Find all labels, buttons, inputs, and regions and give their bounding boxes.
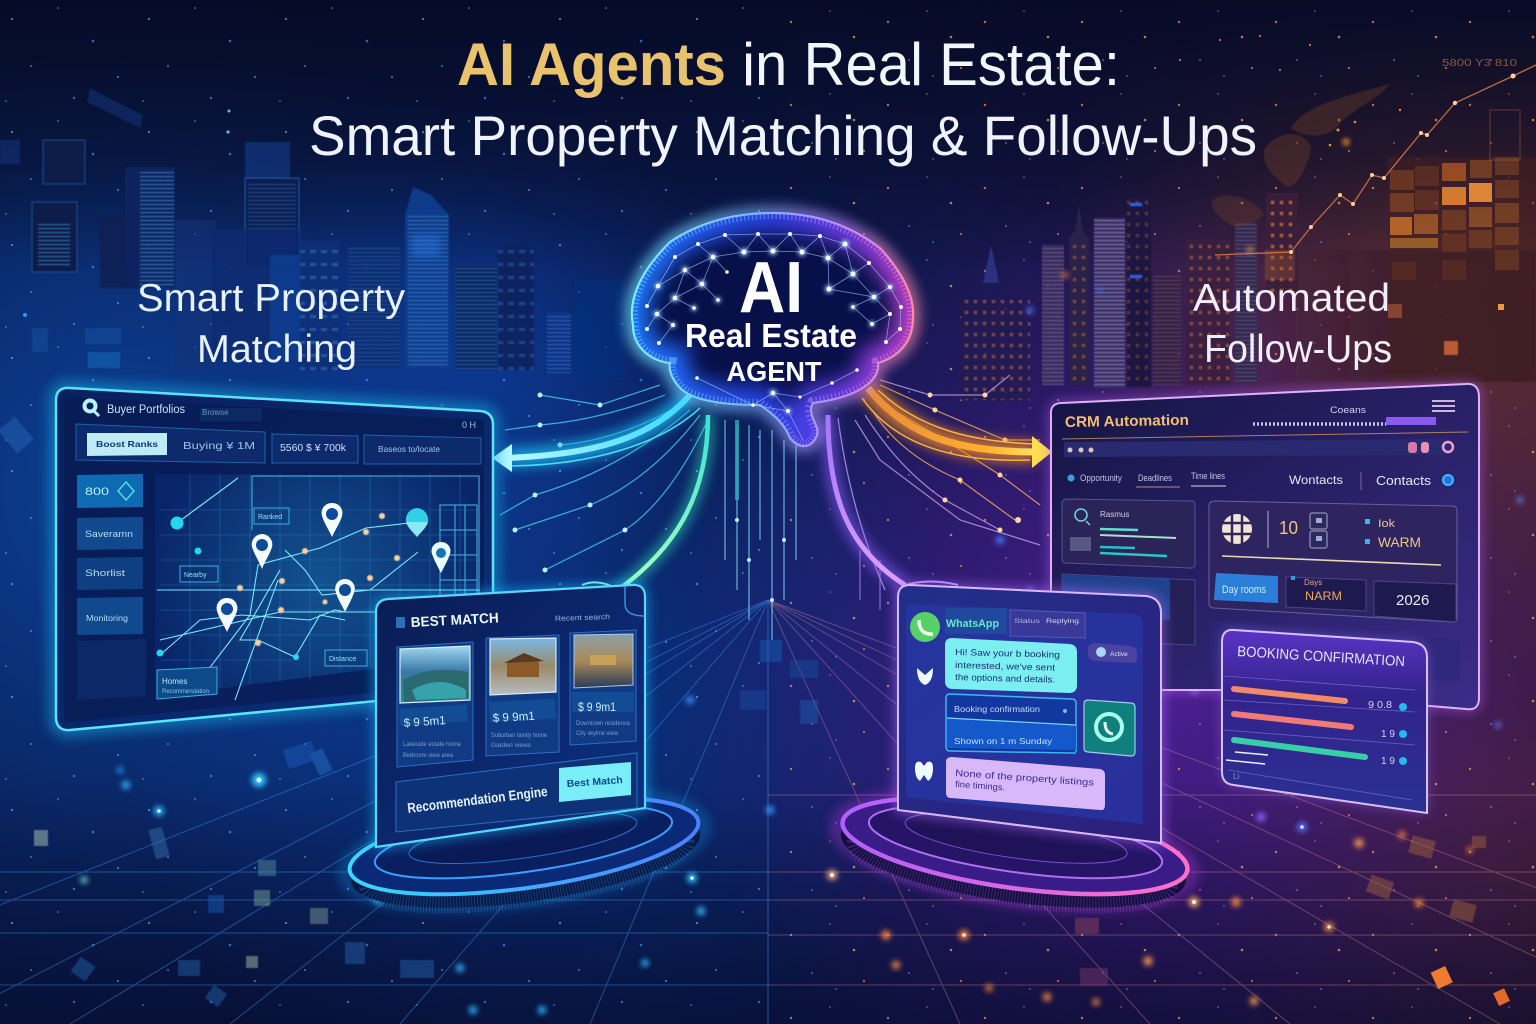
blue reply box: Booking confirmation — [954, 704, 1040, 714]
label: automated follow-ups: Follow-Ups — [1204, 328, 1392, 371]
lead score card: Iok — [1378, 518, 1396, 530]
property card 1: Lakeside estate home — [403, 741, 461, 748]
map pins — [217, 503, 451, 632]
map labels: Homes — [162, 677, 187, 686]
brain label: Real Estate — [685, 317, 857, 354]
property card 3: $ 9 9m1 — [578, 702, 616, 714]
panel: buyer portfolio map: Buyer Portfolios — [107, 404, 185, 416]
heading: BEST MATCH — [410, 609, 499, 630]
property card 3: City skyline view — [576, 730, 618, 737]
status pill — [1088, 643, 1137, 663]
crm tabs: Deadlines — [1138, 473, 1172, 483]
panel: buyer portfolio map: Browse — [202, 408, 229, 417]
sidebar: Shorlist — [85, 568, 126, 578]
property card 1 — [397, 642, 473, 767]
lead score card: NARM — [1305, 589, 1342, 603]
recommendation engine bar: Recommendation Engine — [406, 783, 548, 816]
panel: buyer portfolio map: 0 H — [462, 420, 476, 430]
crm header — [1062, 401, 1468, 439]
label: automated follow-ups: Automated — [1193, 277, 1390, 320]
crm tabs — [1068, 471, 1453, 490]
floor perspective grid — [0, 600, 1536, 1024]
orange window grid top right — [1388, 110, 1520, 355]
lead score card: Day rooms — [1222, 584, 1266, 596]
city skyline left — [0, 88, 625, 380]
panel: booking confirmation: 1 9 — [1381, 756, 1395, 767]
sidebar — [77, 474, 146, 700]
booking bars — [1234, 689, 1345, 701]
label: automated follow-ups — [1193, 277, 1392, 371]
property card 1: $ 9 5m1 — [403, 713, 446, 730]
lavender message bubble: None of the property listings — [955, 768, 1094, 789]
network nodes — [512, 392, 1021, 602]
brain label — [685, 248, 857, 387]
whatsapp header: Status — [1014, 618, 1041, 625]
map routes — [157, 478, 480, 700]
chat icons — [915, 668, 933, 781]
whatsapp header: Replying — [1046, 618, 1079, 625]
contact card — [1062, 499, 1195, 568]
crm header: CRM Automation — [1065, 412, 1189, 431]
panel: booking confirmation: Li — [1233, 772, 1239, 781]
brain: AI real estate agent — [632, 213, 913, 446]
panel: best match — [376, 585, 645, 847]
lead score card: WARM — [1378, 534, 1421, 550]
world map dots and chart line top right: 5800 Y3 810 — [1442, 58, 1518, 69]
brain label: AGENT — [726, 356, 822, 387]
brain label: AI — [739, 248, 803, 328]
map labels — [157, 508, 367, 699]
property card 2: Garden views — [491, 742, 532, 749]
city skyline right — [960, 157, 1536, 400]
filter tabs: Buying ¥ 1M — [183, 441, 255, 452]
cyan message bubble: interested, we've sent — [955, 660, 1056, 673]
sidebar: Monitoring — [86, 613, 128, 623]
brain network — [647, 234, 901, 440]
blue reply box: Shown on 1 m Sunday — [954, 736, 1053, 746]
property card 2 — [486, 635, 559, 756]
blue reply box — [946, 694, 1076, 753]
world map dots and chart line top right — [1179, 35, 1536, 255]
filter tabs: Baseos to/locate — [378, 444, 440, 454]
platform: left ring — [337, 775, 712, 927]
property card 2: $ 9 9m1 — [492, 709, 535, 725]
sidebar: Saveramn — [85, 529, 133, 539]
connector: purple flow to whatsapp — [828, 415, 958, 585]
title: Smart Property Matching & Follow-Ups — [309, 104, 1257, 167]
lead score card: 2026 — [1396, 592, 1429, 609]
crm header: Coeans — [1330, 405, 1367, 415]
cyan message bubble: Hi! Saw your b booking — [955, 647, 1060, 660]
cyan message bubble — [945, 638, 1077, 693]
map labels: Recommendation — [162, 689, 209, 695]
panel: CRM automation — [1051, 384, 1479, 709]
recommendation engine bar — [396, 753, 637, 832]
panel: buyer portfolio map — [56, 388, 493, 730]
panel: booking confirmation: BOOKING CONFIRMATION — [1237, 644, 1405, 670]
lavender message bubble — [946, 757, 1105, 810]
blue card — [1062, 574, 1195, 645]
whatsapp header — [910, 608, 1085, 642]
panel: booking confirmation: 1 9 — [1381, 729, 1395, 740]
panel: whatsapp chat — [898, 585, 1161, 843]
lead score card — [1209, 501, 1457, 622]
map — [155, 474, 480, 700]
connector: orange flow to right panel — [862, 388, 1052, 468]
map dots — [237, 513, 400, 646]
status pill: Active — [1110, 651, 1128, 658]
label: smart property matching — [137, 277, 406, 371]
filter tabs: Boost Ranks — [96, 439, 158, 449]
teal call icon — [1084, 700, 1135, 756]
panel: booking confirmation — [1222, 630, 1427, 813]
label: smart property matching: Matching — [197, 328, 357, 371]
sidebar: 800 — [85, 486, 109, 498]
label: smart property matching: Smart Property — [137, 277, 406, 320]
search icon — [84, 400, 99, 416]
thin network branches — [500, 375, 1040, 640]
crm tabs: Time lines — [1191, 471, 1225, 481]
contact card: Rasmus — [1100, 510, 1129, 519]
property card 3: Downtown residence — [576, 720, 630, 727]
panel: booking confirmation: 9 0.8 — [1368, 700, 1392, 711]
floating data squares — [0, 416, 1510, 1007]
filter tabs: 5560 $ ¥ 700k — [280, 442, 347, 454]
lead score card: 10 — [1279, 518, 1298, 538]
whatsapp header: WhatsApp — [946, 618, 999, 630]
map labels: Distance — [329, 656, 356, 663]
brain nodes — [645, 232, 903, 413]
property card 1: Bedroom view area — [403, 752, 453, 759]
title: AI Agents in Real Estate: — [457, 31, 1120, 98]
title — [309, 31, 1257, 167]
property card 2: Suburban family home — [491, 732, 547, 739]
recommendation engine bar: Best Match — [566, 775, 623, 790]
platform: right ring — [829, 775, 1200, 927]
heading — [396, 609, 610, 630]
lavender message bubble: fine timings. — [955, 779, 1005, 792]
brain node glow — [654, 240, 893, 414]
lead score card: Days — [1304, 578, 1322, 587]
cyan message bubble: the options and details. — [955, 672, 1055, 685]
crm search bar — [1064, 439, 1453, 457]
map labels: Ranked — [258, 514, 282, 521]
filter tabs — [76, 424, 481, 464]
crm tabs: Wontacts — [1289, 473, 1343, 487]
connector: cyan flow to left panel — [492, 395, 700, 472]
crm tabs: Opportunity — [1080, 473, 1122, 483]
connector: green flow to best match — [582, 415, 708, 590]
crm tabs: Contacts — [1376, 474, 1431, 488]
property card 3 — [570, 630, 636, 745]
map labels: Nearby — [184, 572, 207, 579]
heading: Recent search — [555, 612, 610, 623]
